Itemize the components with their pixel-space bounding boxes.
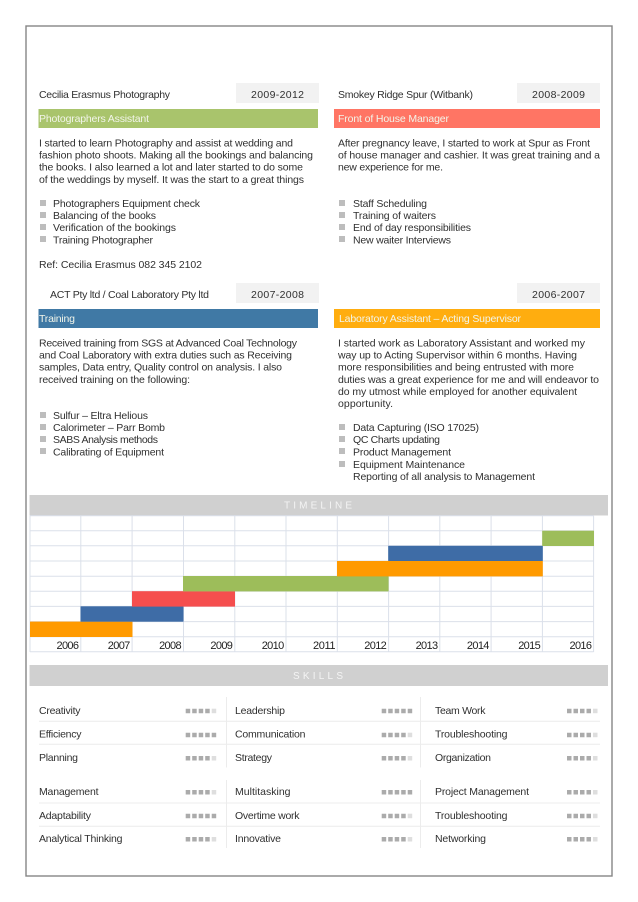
description: the books. I also learned a lot and later started to do some [39,162,303,174]
duties list: Verification of the bookings [53,222,176,234]
date badge: 2007-2008 [251,289,304,301]
role bar [334,109,600,128]
description: After pregnancy leave, I started to work at Spur as Front [338,138,590,150]
description: of the weddings by myself. It was the start to a great things [39,174,304,186]
skills column 3: Project Management [435,786,529,798]
date badge [517,83,600,103]
duties list: Training of waiters [353,210,436,222]
duties list [339,422,535,483]
role bar [334,309,600,328]
skills column 2: Overtime work [235,810,300,822]
role bar: Laboratory Assistant – Acting Supervisor [339,313,522,325]
year axis labels: 2007 [108,640,130,652]
skills column 1: Planning [39,752,78,764]
duties list: Training Photographer [53,234,154,246]
skills column 1 [39,705,216,845]
year axis labels: 2014 [467,640,489,652]
training list: Sulfur – Eltra Helious [53,410,148,422]
role bar: Training [39,313,75,325]
year axis labels: 2016 [570,640,592,652]
year axis labels: 2012 [364,640,387,652]
duties list: Reporting of all analysis to Management [353,471,535,483]
year axis labels: 2010 [262,640,284,652]
year axis labels [56,640,592,652]
description: fashion photo shoots. Making all the bookings and balancing [39,150,313,162]
description [337,338,599,410]
bar 2006-2007 [30,622,132,637]
skills column 3 [435,705,598,845]
skills column 1: Adaptability [39,810,92,822]
employer: Smokey Ridge Spur (Witbank) [338,89,473,101]
year axis labels: 2009 [210,640,233,652]
year axis labels: 2011 [313,640,336,652]
description: and Coal Laboratory with extra duties such as Receiving [39,350,292,362]
description: received training on the following: [39,374,190,386]
duties list: Photographers Equipment check [53,198,201,210]
heading: timeline [30,495,608,516]
description: of house manager and cashier. It was great training and a [338,150,600,162]
description: Received training from SGS at Advanced Coal Technology [39,338,298,350]
duties list: Balancing of the books [53,210,156,222]
bar 2012-2015 [388,546,543,561]
heading: skills [30,665,608,686]
description: I started work as Laboratory Assistant and worked my [338,338,586,350]
skills column 1: Efficiency [39,728,82,740]
description [338,138,600,174]
description: do my utmost while employed for another equivalent [338,386,577,398]
duties list: New waiter Interviews [353,234,451,246]
skills column 3: Troubleshooting [435,810,508,822]
duties list [40,198,201,246]
chart: timeline gantt [30,516,594,652]
heading: timeline: TIMELINE [284,500,352,512]
description: samples, Data entry, Quality control on analysis. I also [39,362,282,374]
duties list [339,198,471,246]
date badge [517,283,600,303]
duties list: Equipment Maintenance [353,459,465,471]
panel: skills grid [39,697,600,848]
panel: Laboratory Assistant [334,283,600,483]
panel: Smokey Ridge Spur [334,83,600,246]
description: new experience for me. [338,162,443,174]
description: I started to learn Photography and assist at wedding and [39,138,293,150]
date badge [236,83,319,103]
year axis labels: 2013 [416,640,438,652]
reference: Ref: Cecilia Erasmus 082 345 2102 [39,259,202,271]
duties list: QC Charts updating [353,434,440,446]
skills column 2: Communication [235,728,306,740]
skills column 2: Strategy [235,752,273,764]
skills column 2 [235,705,412,845]
skills column 2: Innovative [235,833,281,845]
duties list: Staff Scheduling [353,198,427,210]
skills column 3: Troubleshooting [435,728,508,740]
employer: ACT Pty ltd / Coal Laboratory Pty ltd [50,289,209,301]
duties list: End of day responsibilities [353,222,471,234]
role bar [38,309,318,328]
description [39,138,313,186]
description: opportunity. [338,398,393,410]
skills column 1: Analytical Thinking [39,833,123,845]
description: way up to Acting Supervisor within 6 months. Having [337,350,577,362]
role bar: Photographers Assistant [39,113,149,125]
bar 2011-2015 [337,561,543,576]
skills column 2: Leadership [235,705,285,717]
year axis labels: 2006 [56,640,79,652]
skills column 3: Organization [435,752,491,764]
role bar [38,109,318,128]
duties list: Product Management [353,446,451,458]
panel: Cecilia Erasmus Photography [38,83,319,271]
bar 2007-2008 [80,606,184,622]
role bar: Front of House Manager [338,113,450,125]
skills column 2: Multitasking [235,786,291,798]
duties list: Data Capturing (ISO 17025) [353,422,479,434]
date badge [236,283,319,303]
bar 2015-2016 [542,531,594,546]
training list: SABS Analysis methods [53,434,158,446]
description: duties was a great experience for me and will endeavor to [338,374,599,386]
year axis labels: 2015 [518,640,541,652]
description: more responsibilities and being entrusted with more [338,362,574,374]
year axis labels: 2008 [159,640,182,652]
skills column 1: Management [39,786,99,798]
panel: ACT Coal Laboratory [38,283,319,458]
skills column 3: Networking [435,833,486,845]
training list: Calorimeter – Parr Bomb [53,422,165,434]
date badge: 2009-2012 [251,89,304,101]
bar 2009-2012 [183,576,389,591]
employer: Cecilia Erasmus Photography [39,89,171,101]
skills column 3: Team Work [435,705,486,717]
bar 2008-2009 [132,591,235,607]
date badge: 2006-2007 [532,289,585,301]
skills column 1: Creativity [39,705,81,717]
training list: Calibrating of Equipment [53,446,164,458]
heading: skills: SKILLS [293,671,343,682]
description [39,338,298,386]
date badge: 2008-2009 [532,89,585,101]
training list [40,410,165,458]
